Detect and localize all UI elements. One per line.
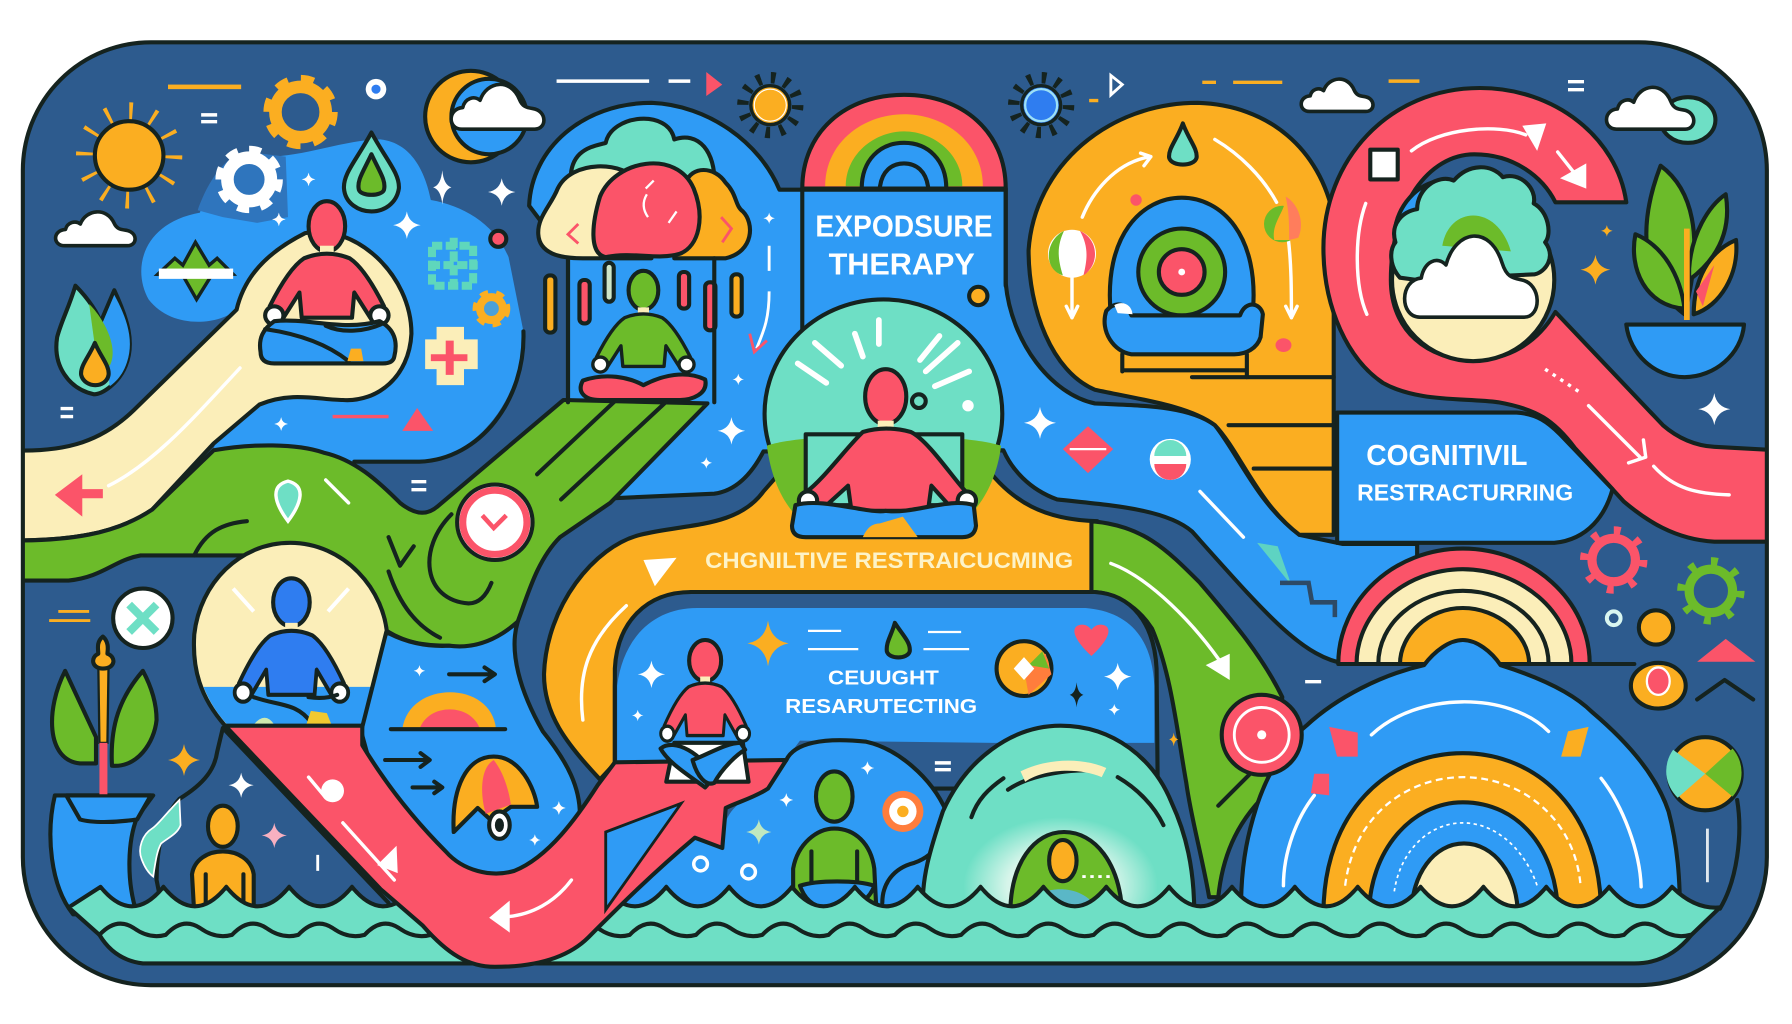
check badge xyxy=(457,485,533,560)
map pin xyxy=(276,481,300,521)
icons: right column xyxy=(1305,530,1755,909)
person: small red sitting xyxy=(661,640,750,741)
person: green bust xyxy=(793,771,877,914)
white curved arrow xyxy=(489,880,571,933)
icon: medical cross xyxy=(425,327,478,385)
green arc xyxy=(1442,216,1511,251)
icon: mountain xyxy=(158,242,233,299)
arrows xyxy=(385,667,495,793)
icon: split circle xyxy=(1150,439,1191,480)
icon: cloud right with crescent xyxy=(1607,87,1715,143)
top gold dashes xyxy=(1089,81,1419,101)
marks and stars xyxy=(61,113,426,491)
green path detail lines xyxy=(194,383,674,638)
teal splash xyxy=(140,800,181,877)
right teal dome with green arch xyxy=(923,726,1194,954)
cream path with arrow xyxy=(11,232,411,541)
kite shapes xyxy=(1329,727,1358,757)
icon: close badge xyxy=(113,589,173,648)
icon: orange gear xyxy=(269,80,333,144)
cream head circle and first meditator xyxy=(260,201,396,363)
icon: orange dot xyxy=(1639,610,1673,645)
icon: small cloud xyxy=(56,212,135,246)
decor stars right xyxy=(1024,225,1730,439)
white arcs xyxy=(1411,129,1526,151)
upper blue river panel xyxy=(529,103,1417,664)
stem xyxy=(98,663,109,743)
white arrow on path xyxy=(581,606,626,720)
text line 2: RESARUTECTING xyxy=(785,696,977,718)
person: red center xyxy=(792,369,976,537)
green path xyxy=(11,383,707,647)
teal cloud xyxy=(1391,167,1550,280)
marks xyxy=(1305,680,1321,683)
lower blue details xyxy=(229,665,566,871)
mark on navy xyxy=(935,761,951,771)
panel wall xyxy=(802,189,1006,343)
blue legs xyxy=(260,321,396,363)
orange double dash xyxy=(49,611,90,621)
icon: therapy chair xyxy=(1105,198,1263,377)
icon: orange diamond on navy xyxy=(1169,733,1178,746)
green arrow xyxy=(1111,563,1225,669)
light rays xyxy=(798,320,969,386)
right orange arch with chair xyxy=(1029,103,1334,535)
rect wall under cloud xyxy=(568,258,714,402)
leaf right xyxy=(112,671,157,766)
lower left blue region xyxy=(157,728,389,914)
icon: leaf drop xyxy=(56,286,130,394)
brain marks xyxy=(644,181,677,223)
icons: top center suns xyxy=(557,72,1584,133)
icon: red dots xyxy=(1130,194,1291,352)
vertical white line xyxy=(1706,829,1709,882)
orange dot xyxy=(969,287,987,305)
rings xyxy=(694,857,755,879)
river line xyxy=(1200,491,1243,537)
cream center xyxy=(1411,843,1518,914)
icon: sun blue xyxy=(1014,78,1069,133)
orange dash xyxy=(168,85,241,89)
white dashes xyxy=(326,480,349,503)
icon: potted plant right xyxy=(1626,166,1744,377)
dark side tube xyxy=(1720,800,1739,909)
blob outline right side xyxy=(354,331,524,462)
small icons: upper left xyxy=(56,71,544,491)
subtitle: THERAPY xyxy=(829,246,975,281)
icon: orange target xyxy=(882,791,923,832)
pot water xyxy=(50,795,153,914)
text line 1: CEUUGHT xyxy=(828,668,939,690)
rainbow arch xyxy=(802,95,1006,189)
icon: pie ball xyxy=(997,641,1051,696)
right red path xyxy=(1323,88,1778,542)
stars xyxy=(229,665,566,848)
blue region with umbrella xyxy=(361,622,580,914)
arrows around chair xyxy=(1082,153,1151,217)
icon: sunset xyxy=(391,692,505,729)
leaf left xyxy=(52,671,96,763)
cream cloud xyxy=(538,166,651,258)
icon: red triangle xyxy=(1697,639,1755,662)
icon: red dot xyxy=(490,231,506,247)
icon: green gear xyxy=(1681,561,1741,621)
icon: small ring xyxy=(1607,611,1621,625)
teal cloud xyxy=(569,116,716,176)
icon: cloud top xyxy=(1301,79,1373,111)
second wave line xyxy=(99,924,1690,936)
white cloud xyxy=(1405,236,1537,317)
darker blue patch behind white gear xyxy=(198,152,288,223)
icon: orange star xyxy=(747,621,789,666)
icon: left potted plant xyxy=(50,637,157,914)
blue peek behind cloud xyxy=(1394,181,1442,240)
orange cloud xyxy=(674,170,750,258)
icon: chevron xyxy=(1697,680,1753,699)
baseline xyxy=(1394,662,1634,666)
chevrons xyxy=(568,217,731,243)
person: red sitting xyxy=(260,201,396,363)
panel: exposure therapy xyxy=(802,95,1006,305)
text line 1: COGNITIVIL xyxy=(1366,440,1527,472)
icon: segmented ball xyxy=(1666,737,1742,810)
cloud cluster with rain xyxy=(538,119,750,333)
title: EXPODSURE xyxy=(815,209,993,244)
green right path xyxy=(1091,521,1282,897)
water waves band xyxy=(69,887,1720,963)
icon: flame ball xyxy=(1264,197,1301,242)
path highlight xyxy=(109,368,240,486)
small stars xyxy=(632,661,1131,721)
icon: umbrella xyxy=(453,757,537,839)
icon: red diamond xyxy=(1063,426,1113,473)
arrow: red left xyxy=(55,474,103,517)
icon: triangle white xyxy=(1111,75,1122,95)
heading: cognitive restructuring: CHGNILTIVE RESTRAICUCMING xyxy=(705,548,1073,573)
icon: white gear xyxy=(221,151,278,208)
icon: water drop xyxy=(344,133,399,211)
big right dome xyxy=(1241,640,1680,914)
lower blue hill with green person xyxy=(594,740,947,914)
icon: small drop xyxy=(887,623,910,657)
text line 2: RESTRACTURRING xyxy=(1357,480,1573,506)
icon: ring dot xyxy=(366,79,386,99)
icon: top drop xyxy=(1169,123,1197,165)
person: blue sitting xyxy=(235,578,348,725)
icon: ball left xyxy=(1048,230,1096,278)
icon: red gear xyxy=(1584,530,1643,590)
red triangle with dash xyxy=(333,408,433,431)
red brain xyxy=(593,163,700,257)
green arch person xyxy=(1010,832,1122,914)
orange small star xyxy=(168,744,200,776)
marks xyxy=(1568,80,1584,91)
dark blue slab xyxy=(606,803,681,910)
white slider arrow xyxy=(309,777,398,880)
stars xyxy=(746,761,874,845)
panel: central blue with caught restructuring xyxy=(615,592,1158,789)
red target circle xyxy=(1218,695,1302,806)
red legs xyxy=(581,375,706,400)
icon: triangle red xyxy=(706,72,722,96)
head circle xyxy=(1392,199,1554,361)
icon: teal glitch rune xyxy=(430,238,478,291)
icon: crescent moon with cloud xyxy=(425,71,544,162)
icon: small steps xyxy=(1280,583,1335,617)
panel: cognitive restructuring xyxy=(1337,413,1613,543)
white arcs xyxy=(1371,702,1549,735)
orange arch xyxy=(1323,753,1601,914)
top dash lines xyxy=(557,80,690,83)
stars cluster xyxy=(272,170,515,431)
icon: teal kite xyxy=(1257,543,1291,585)
teal dome center xyxy=(765,299,1002,537)
white square xyxy=(1370,150,1398,179)
red lower path xyxy=(225,726,786,967)
blue blob behind first meditator xyxy=(141,139,523,462)
orange center path xyxy=(544,463,1097,779)
person: green sitting xyxy=(581,271,706,400)
icon: sun xyxy=(85,111,174,200)
rain bars xyxy=(545,263,742,333)
decor lines xyxy=(808,631,969,649)
top right rainbow xyxy=(1338,549,1590,664)
icon: target eye xyxy=(1631,663,1686,709)
icon: sun orange xyxy=(743,78,798,133)
person: orange bust xyxy=(192,806,254,914)
person legs on path xyxy=(661,743,749,787)
right arrow decor xyxy=(701,213,775,469)
lower left person circle xyxy=(194,543,387,726)
legs box xyxy=(792,503,976,537)
icon: heart xyxy=(1074,625,1108,656)
stair lines xyxy=(1192,377,1334,469)
icon: small orange gear xyxy=(475,293,507,325)
